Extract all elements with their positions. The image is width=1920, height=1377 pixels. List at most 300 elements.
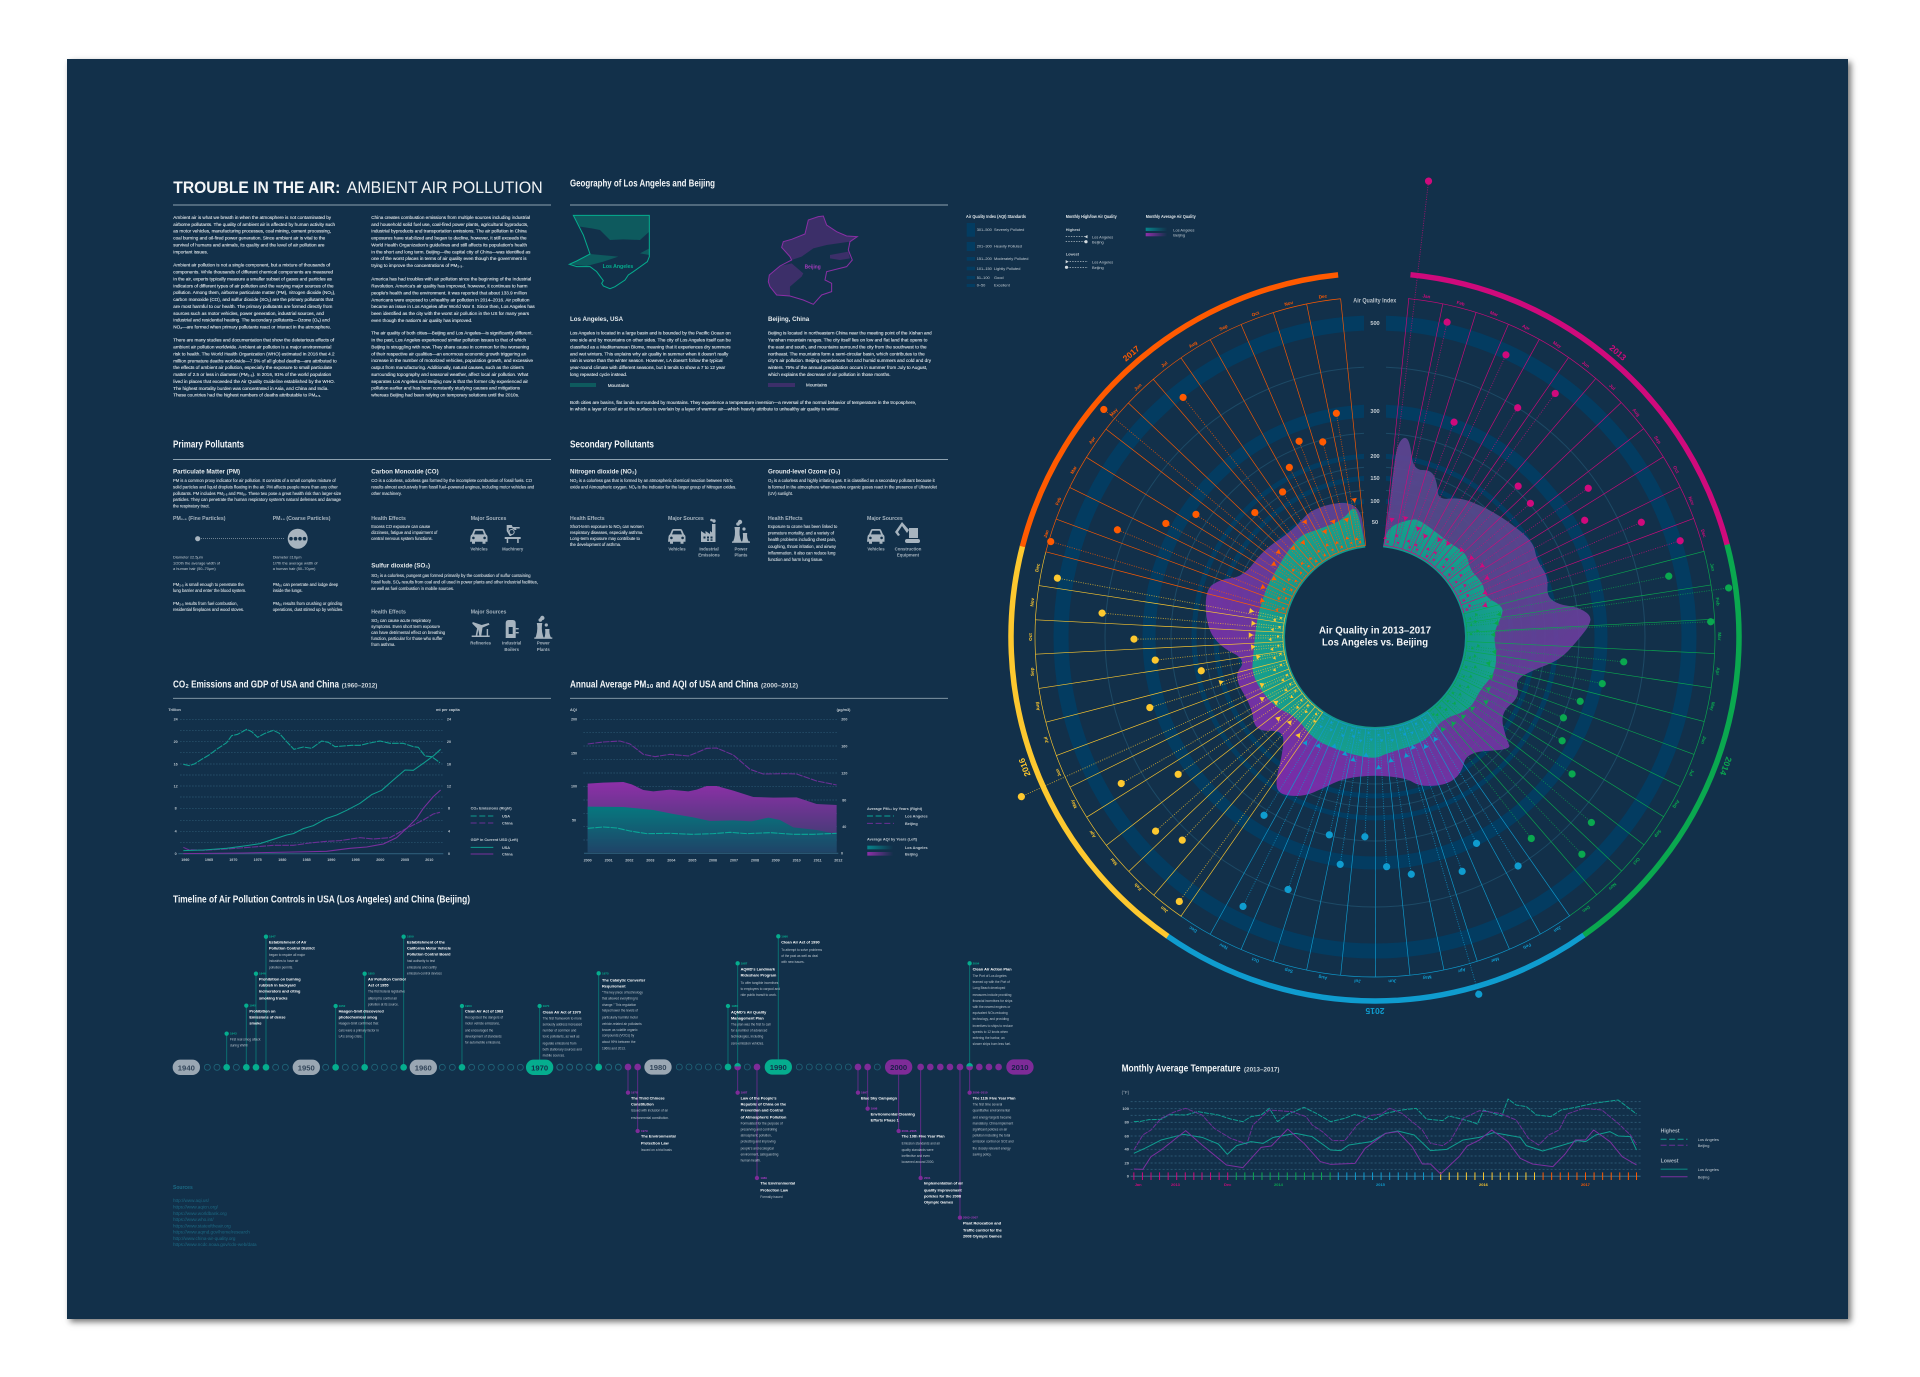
event 1998: Environmental Cleaning bbox=[871, 1113, 915, 1117]
event 2001: 2001 bbox=[924, 1176, 931, 1180]
text: particle notes: lung barrier and enter the blood system. bbox=[173, 588, 246, 593]
event 2001 bbox=[918, 1176, 963, 1205]
year 2014 sector bbox=[960, 222, 1790, 1052]
event 2000–2005: loosened around 2000. bbox=[902, 1160, 934, 1164]
event 2006–2010: mandatory. China implement bbox=[973, 1122, 1013, 1126]
labels: SO2 sources: Industrial bbox=[502, 641, 521, 646]
legend: AQI standards: 301–500 bbox=[977, 227, 993, 232]
ozone block: coughing, throat irritation, and airway bbox=[768, 544, 837, 549]
legend: temperature bbox=[1661, 1128, 1719, 1179]
Los Angeles monthly average area bbox=[1252, 509, 1503, 758]
line chart: CO2 and GDP: Trillion bbox=[168, 708, 182, 712]
year 2013 sector: Sep bbox=[1653, 435, 1662, 445]
timeline 1975–2010 bbox=[557, 934, 1034, 1239]
event 1997: 1997 bbox=[861, 1091, 868, 1095]
labels: NO2 sources: Plants bbox=[735, 553, 748, 558]
carbon monoxide block: Major Sources bbox=[471, 516, 507, 522]
intro text column 1: carbon monoxide (CO), and sulfur dioxide (SO₂) are the primary pollutants that bbox=[173, 297, 334, 302]
panel: CO2 and GDP chart bbox=[168, 679, 519, 862]
event 1986: technologies, including bbox=[731, 1035, 763, 1039]
nitrogen dioxide block: respiratory diseases, especially asthma. bbox=[570, 530, 643, 535]
legend: CO2 chart: GDP in Current USD (Left) bbox=[471, 838, 519, 842]
year 2016 sector: Jul bbox=[1043, 736, 1050, 744]
event 1975: vehicle-related air pollutants bbox=[602, 1022, 642, 1026]
sources: https://www.ncdc.noaa.gov/cdo-web/data bbox=[173, 1242, 257, 1247]
year 2016 sector: Jan bbox=[1160, 905, 1169, 914]
timeline axis 1975–2010: 1980 bbox=[649, 1063, 667, 1072]
center title bbox=[1319, 624, 1431, 648]
intro text column 2: and household solid fuel use, coal-fired power plants, agricultural byproducts, bbox=[371, 222, 528, 227]
event 1978: environmental constitution. bbox=[631, 1116, 669, 1120]
year 2014 sector: Jul bbox=[1688, 769, 1695, 777]
year 2013 sector: May bbox=[1552, 340, 1563, 349]
event 1955 bbox=[362, 971, 406, 1007]
event 1975: 1975 bbox=[602, 971, 609, 975]
event 2006–2010: quantitative environmental bbox=[973, 1109, 1010, 1113]
legend: PM10 chart: Beijing bbox=[905, 822, 918, 826]
line chart: CO2 and GDP: 1965 bbox=[205, 858, 213, 862]
intro text column 1: million premature deaths worldwide—7.5% of all global deaths—are attributed to bbox=[173, 358, 337, 363]
text: Beijing geography: northeast. The mountains form a semi-circular basin, which contributes to the bbox=[768, 351, 925, 356]
event 2004: speeds to 12 knots when bbox=[973, 1030, 1008, 1034]
line chart: CO2 and GDP: 1970 bbox=[229, 858, 237, 862]
carbon monoxide block: dizziness, fatigue and impairment of bbox=[371, 530, 438, 535]
heading: timeline: Timeline of Air Pollution Controls in USA (Los Angeles) and China (Beijing) bbox=[173, 894, 470, 906]
sources: https://www.who.int/ bbox=[173, 1217, 214, 1222]
intro text column 2: Revolution. America's air quality has improved, however, it continues to harm bbox=[371, 284, 528, 289]
AQI scale labels: 300 bbox=[1370, 409, 1380, 415]
event 1987 rideshare: 1987 bbox=[741, 961, 748, 965]
icon: particle size comparison bbox=[195, 529, 308, 549]
year 2017 sector: Oct bbox=[1251, 310, 1260, 318]
event 1963: Recognized the dangers of bbox=[465, 1016, 503, 1020]
legend: monthly high/low: Monthly High/low Air Quality bbox=[1066, 214, 1117, 219]
event 2006–2010: pollution including the total bbox=[973, 1134, 1010, 1138]
intro text column 1: Ambient air pollution is not a single component, but a mixture of thousands of bbox=[173, 263, 331, 268]
intro text column 2 bbox=[371, 215, 535, 398]
event 1979: Issued on a trial basis bbox=[641, 1148, 672, 1152]
event 1959: had authority to test bbox=[407, 959, 435, 963]
year 2013 sector: 2013 bbox=[1607, 343, 1629, 363]
year 2014 sector: Aug bbox=[1672, 799, 1681, 809]
area chart: PM10 and AQI: 2012 bbox=[834, 858, 842, 862]
intro text column 1: NO₂—are formed when primary pollutants react or interact in the atmosphere. bbox=[173, 325, 331, 330]
legend: PM10 chart: Los Angeles bbox=[905, 815, 928, 819]
text: Beijing geography: winters. 75% of the annual precipitation occurs in summer from July to August, bbox=[768, 365, 927, 370]
event 1970: Clean Air Act of 1970 bbox=[543, 1011, 581, 1015]
event 1978 bbox=[626, 1090, 669, 1120]
map: Beijing: Beijing bbox=[805, 265, 821, 271]
heading: secondary pollutants: Secondary Pollutants bbox=[570, 439, 654, 451]
intro text column 2: China creates combustion emissions from multiple sources including industrial bbox=[371, 215, 530, 220]
panel: timeline bbox=[173, 894, 1034, 1239]
line chart: temperature: 2014 bbox=[1274, 1182, 1284, 1187]
year 2013 sector: Nov bbox=[1687, 496, 1696, 506]
line chart: temperature: 20 bbox=[1125, 1160, 1130, 1165]
event 1987 rideshare: Rideshare Program bbox=[741, 974, 777, 978]
labels: ozone sources: Vehicles bbox=[867, 547, 885, 552]
nitrogen dioxide block: Health Effects bbox=[570, 516, 605, 522]
event 1945: Emissions of dense bbox=[249, 1016, 286, 1020]
sulfur dioxide block bbox=[371, 563, 538, 647]
line chart: temperature: 2015 bbox=[1376, 1182, 1386, 1187]
intro text column 2: pollution earlier and has been constantly studying causes and mitigations bbox=[371, 386, 521, 391]
event 1990: of the past as well as deal bbox=[781, 954, 818, 958]
event 1970: toxic pollutants, as well as bbox=[543, 1035, 580, 1039]
legend: temperature: Beijing bbox=[1698, 1143, 1709, 1148]
text: Los Angeles geography: one side and by mountains on other sides. The city of Los Angeles itself can be bbox=[570, 338, 731, 343]
labels: NO2 sources: Vehicles bbox=[668, 547, 686, 552]
event 2003–2007: 2008 Olympic Games bbox=[963, 1235, 1002, 1239]
area chart: PM10 and AQI: 100 bbox=[571, 785, 577, 789]
event 1959: Pollution Control Board bbox=[407, 953, 451, 957]
legend: CO2 chart: China bbox=[502, 822, 513, 826]
event 1987 atmospheric law: environment, safeguarding bbox=[741, 1153, 779, 1157]
year 2015 sector: Dec bbox=[1188, 925, 1198, 934]
labels: SO2 sources: Plants bbox=[537, 647, 550, 652]
legend: monthly high/low: Highest bbox=[1066, 227, 1081, 232]
carbon monoxide block: Carbon Monoxide (CO) bbox=[371, 469, 439, 476]
intro text column 1: airborne pollutants. The quality of ambient air is affected by human activity such bbox=[173, 222, 335, 227]
line chart: CO2 and GDP: 1990 bbox=[327, 858, 335, 862]
line chart: CO2 and GDP: 12 bbox=[174, 784, 178, 788]
intro text column 2: output from manufacturing. Additionally, natural causes, such as the cities's bbox=[371, 365, 524, 370]
nitrogen dioxide block: Short-term exposure to NO₂ can worsen bbox=[570, 524, 644, 529]
year 2015 sector bbox=[902, 164, 1848, 1110]
year 2016 sector: Feb bbox=[1133, 882, 1143, 892]
event 1952: Haagen-Smit confirmed that bbox=[339, 1022, 378, 1026]
legend: AQI standards: Lightly Polluted bbox=[994, 266, 1020, 271]
labels: CO sources bbox=[470, 547, 524, 552]
event 2006–2010: saving policy. bbox=[973, 1153, 992, 1157]
event 1947 bbox=[264, 934, 315, 970]
AQI scale labels: Air Quality Index bbox=[1353, 298, 1397, 305]
year 2015 sector: Jun bbox=[1388, 978, 1397, 984]
text: Los Angeles geography bbox=[570, 316, 731, 388]
event 1979: The Environmental bbox=[641, 1135, 676, 1139]
AQI scale labels: 100 bbox=[1370, 499, 1380, 505]
intro text column 2: industrial byproducts and transportation emissions. The air pollution in China bbox=[371, 229, 527, 234]
line chart: CO2 and GDP: 0 bbox=[175, 852, 177, 856]
intro text column 1: in the air, experts typically measure a smaller subset of gases and particles as bbox=[173, 276, 333, 281]
area chart: PM10 and AQI: 2002 bbox=[625, 858, 633, 862]
map: Beijing bbox=[768, 216, 857, 304]
area chart: PM10 and AQI: 160 bbox=[841, 744, 847, 748]
event 1945: smoke bbox=[249, 1022, 262, 1026]
intro text column 2: of their respective air qualities—an enormous economic growth triggering an bbox=[371, 351, 527, 356]
event 1975: 1960s and 2013. bbox=[602, 1047, 626, 1051]
event 1986: zero-emission vehicles. bbox=[731, 1042, 764, 1046]
year 2015 sector: Oct bbox=[1251, 956, 1260, 964]
legend: PM10 chart: Beijing bbox=[905, 853, 918, 857]
legend: monthly average: Monthly Average Air Quality bbox=[1146, 214, 1196, 219]
intro text column 2: surrounding topography and seasonal weather, affect local air pollution. What bbox=[371, 372, 529, 377]
event 1946: rubbish in backyard bbox=[259, 984, 296, 988]
icon: vehicles bbox=[867, 529, 884, 544]
event 2006–2010: significant policies on air bbox=[973, 1128, 1008, 1132]
map: Los Angeles bbox=[569, 215, 649, 289]
event 1955: Air Pollution Control bbox=[368, 978, 406, 982]
event 2003–2007 bbox=[958, 1215, 1003, 1239]
Beijing monthly average area bbox=[1206, 438, 1590, 796]
event 1959: Establishment of the bbox=[407, 941, 446, 945]
text: both cities: in which a layer of cool air at the surface is overlain by a layer of warmer air—which heavily attribute to unhealthy air quality in winter. bbox=[570, 407, 840, 412]
year 2016 sector: May bbox=[1069, 799, 1078, 809]
timeline axis 1940–1979 bbox=[173, 1060, 621, 1075]
year 2016 sector: Oct bbox=[1028, 633, 1033, 641]
line chart: CO2 and GDP: 16 bbox=[447, 762, 451, 766]
icon: industrial boilers bbox=[506, 620, 519, 638]
legend: AQI standards: 151–200 bbox=[977, 256, 993, 261]
event 2006–2010: The first time several bbox=[973, 1103, 1002, 1107]
timeline axis 1975–2010: 2000 bbox=[890, 1063, 907, 1072]
panel: monthly average temperature bbox=[1122, 1063, 1719, 1187]
legend: AQI standards: Moderately Polluted bbox=[994, 256, 1028, 261]
panel: secondary pollutants bbox=[570, 439, 938, 562]
line chart: CO2 and GDP: 1975 bbox=[254, 858, 262, 862]
legend: monthly high/low: Los Angeles bbox=[1092, 234, 1113, 240]
sulfur dioxide block: Sulfur dioxide (SO₂) bbox=[371, 563, 430, 570]
intro text column 1: indicators of different types of air pollution and the varying major sources of the bbox=[173, 283, 334, 288]
line chart: CO2 and GDP: 1980 bbox=[278, 858, 286, 862]
year 2016 sector: 2016 bbox=[1016, 757, 1032, 778]
area chart: PM10 and AQI: 200 bbox=[841, 718, 847, 722]
event 1955: The first federal legislative bbox=[368, 990, 405, 994]
year 2017 sector bbox=[961, 223, 1789, 1051]
icon: industrial emissions bbox=[701, 519, 716, 542]
area chart: PM10 and AQI: 2001 bbox=[605, 858, 613, 862]
event 2006–2010: the closely relevant energy bbox=[973, 1147, 1011, 1151]
intro text column 1: The highest mortality burden was concentrated in Asia, and China and India. bbox=[173, 386, 329, 391]
carbon monoxide block: Excess CO exposure can cause bbox=[371, 524, 431, 529]
carbon monoxide block: other machinery. bbox=[371, 491, 402, 496]
carbon monoxide block: results almost exclusively from fossil fuel–powered engines, including motor vehicles and bbox=[371, 484, 535, 490]
event 2004: Clean Air Action Plan bbox=[973, 968, 1012, 972]
event 1970: both stationary sources and bbox=[543, 1048, 582, 1052]
legend: AQI standards: Severely Polluted bbox=[994, 227, 1024, 232]
intro text column 1: survival of humans and animals, its quality and the level of air pollution are bbox=[173, 242, 325, 247]
event 1945: Prohibition on bbox=[249, 1010, 276, 1014]
event 1975: particularly harmful motor bbox=[602, 1016, 639, 1020]
particulate matter block: solid particles and liquid droplets floating in the air. PM affects people more than any other bbox=[173, 484, 338, 489]
intro text column 1: components. While thousands of different chemical components are measured bbox=[173, 270, 334, 275]
event 1975: Requirement bbox=[602, 985, 626, 989]
text: Los Angeles geography: rain is worse than the winter season. However, LA doesn't follow the typical bbox=[570, 358, 723, 363]
event 1987 atmospheric law: people's and ecological bbox=[741, 1147, 774, 1151]
AQI scale labels: 500 bbox=[1370, 321, 1380, 327]
line chart: CO2 and GDP: 1985 bbox=[303, 858, 311, 862]
event 2004: technology, and providing bbox=[973, 1017, 1009, 1021]
panel: geography bbox=[569, 178, 932, 412]
legend: monthly high/low: Lowest bbox=[1066, 252, 1080, 257]
area chart: PM10 and AQI: 2005 bbox=[688, 858, 696, 862]
sulfur dioxide block: as well as fuel combustion in mobile sources. bbox=[371, 586, 454, 591]
event 1987 atmospheric law: Formulated for the purpose of bbox=[741, 1122, 783, 1126]
intro text column 2: The air quality of both cities—Beijing and Los Angeles—is significantly different. bbox=[371, 331, 533, 336]
area chart: PM10 and AQI: 120 bbox=[841, 771, 847, 775]
intro text column 2: Americans were exposed to unhealthy air pollution in 2014–2016. Air pollution bbox=[371, 297, 530, 302]
carbon monoxide block: Health Effects bbox=[371, 516, 406, 522]
legend: monthly average: Beijing bbox=[1173, 233, 1185, 238]
event 1955: Act of 1955 bbox=[368, 984, 389, 988]
text: particle notes: PM₂.₅ is small enough to penetrate the bbox=[173, 582, 244, 587]
event 1979: 1979 bbox=[641, 1129, 648, 1133]
text: Los Angeles geography: and wet winters. This explains why air quality in summer when it doesn't really bbox=[570, 351, 729, 356]
event 1987 atmospheric law: of Atmospheric Pollution bbox=[741, 1116, 787, 1120]
year 2015 sector: Sep bbox=[1284, 967, 1293, 974]
intro text column 1: lived in places that exceeded the Air Quality Guideline established by the WHO. bbox=[173, 379, 335, 384]
ozone block: premature mortality, and a variety of bbox=[768, 531, 835, 536]
text: particle notes: Diameter ≤10μm bbox=[273, 555, 302, 560]
area chart: PM10 and AQI: 2000 bbox=[584, 858, 592, 862]
poster title: AMBIENT AIR POLLUTION bbox=[347, 178, 543, 197]
area chart: PM10 and AQI: 200 bbox=[571, 718, 577, 722]
sulfur dioxide block: function, particular for those who suffer bbox=[371, 636, 443, 641]
intro text column 2: increase in the number of motorized vehicles, population growth, and excessive bbox=[371, 358, 533, 363]
timeline axis 1975–2010: 1990 bbox=[770, 1063, 787, 1072]
area chart: PM10 and AQI: AQI bbox=[570, 708, 577, 712]
legend: AQI standards: 101–150 bbox=[977, 266, 993, 271]
particulate matter block bbox=[173, 469, 342, 522]
text: particle notes: operations, dust stirred up by vehicles. bbox=[273, 607, 343, 612]
event 1975: that allowed everything to bbox=[602, 997, 638, 1001]
event 1947: Pollution Control District bbox=[269, 947, 315, 951]
intro text column 2: even though the nation's air quality has improved. bbox=[371, 318, 472, 323]
year 2014 sector: 2014 bbox=[1718, 756, 1734, 777]
line chart: CO2 and GDP: 4 bbox=[448, 830, 451, 834]
event 1947: pollution permits. bbox=[269, 966, 293, 970]
year 2015 sector: May bbox=[1422, 974, 1432, 981]
event 1975: about 99% between the bbox=[602, 1040, 636, 1044]
legend: PM10 chart bbox=[867, 807, 928, 857]
event 1959: 1959 bbox=[407, 935, 414, 939]
line chart: temperature: Jan bbox=[1135, 1182, 1142, 1187]
year 2014 sector: Jan bbox=[1709, 563, 1716, 572]
event 1990: To attempt to solve problems bbox=[781, 948, 822, 952]
intro text column 2: trying to improve the concentrations of PM₂.₅. bbox=[371, 263, 464, 268]
area chart: PM10 and AQI: 150 bbox=[571, 752, 577, 756]
ozone block: health problems including chest pain, bbox=[768, 537, 836, 542]
timeline axis 1940–1979: 1960 bbox=[415, 1063, 432, 1072]
event 1975: helped lower the levels of bbox=[602, 1009, 638, 1013]
intro text column 2: became an issue in Los Angeles after World War II. Since then, Los Angeles has bbox=[371, 304, 535, 309]
area chart: PM10 and AQI: 2006 bbox=[709, 858, 717, 862]
line chart: temperature: Dec bbox=[1224, 1182, 1232, 1187]
event 1990: Clean Air Act of 1990 bbox=[781, 941, 820, 945]
intro text column 1: coal burning and oil-fired power generation. Since ambient air is vital to the bbox=[173, 236, 326, 241]
area chart: PM10 and AQI: 2008 bbox=[751, 858, 759, 862]
event 1947: 1947 bbox=[269, 935, 276, 939]
timeline axis 1940–1979: 1970 bbox=[531, 1063, 548, 1072]
event 1986 bbox=[726, 1004, 771, 1046]
event 1970: The first framework to more bbox=[543, 1017, 582, 1021]
event 2004 bbox=[967, 961, 1013, 1046]
event 2001: Olympic Games bbox=[924, 1201, 953, 1205]
line chart: temperature: (°F) bbox=[1122, 1090, 1130, 1095]
legend: AQI standards bbox=[966, 214, 1028, 288]
heading: temperature: (2013–2017) bbox=[1244, 1067, 1280, 1074]
year 2014 sector: Sep bbox=[1653, 829, 1662, 839]
year 2015 sector: Jan bbox=[1553, 925, 1562, 933]
year 2017 sector: Jun bbox=[1133, 382, 1143, 392]
event 1978: Issued with inclusion of an bbox=[631, 1109, 668, 1113]
event 2004: financial incentives for ships bbox=[973, 999, 1013, 1003]
event 1963: for automobile emissions. bbox=[465, 1041, 501, 1045]
event 1975: The Catalytic Converter bbox=[602, 979, 646, 983]
event 1978: 1978 bbox=[631, 1091, 638, 1095]
line chart: temperature: 80 bbox=[1125, 1120, 1130, 1125]
particulate matter block: PM₁₀ (Coarse Particles) bbox=[273, 516, 331, 522]
carbon monoxide block: CO is a colorless, odorless gas formed by the incomplete combustion of fossil fuels. CO bbox=[371, 478, 533, 483]
intro text column 1: ambient air pollution worldwide. Ambient air pollution is a major environmental bbox=[173, 345, 331, 350]
heading: primary pollutants: Primary Pollutants bbox=[173, 439, 244, 451]
event 1978: The Third Chinese bbox=[631, 1097, 666, 1101]
sources: https://www.aqicn.org/ bbox=[173, 1204, 219, 1210]
event 1990: with new issues. bbox=[781, 960, 805, 964]
center title: Los Angeles vs. Beijing bbox=[1322, 636, 1428, 648]
event 2004: with the newest engines or bbox=[973, 1005, 1011, 1009]
legend: monthly average: Los Angeles bbox=[1173, 228, 1195, 232]
event 1946: incinerators and citing bbox=[259, 990, 301, 994]
labels: SO2 sources: Boilers bbox=[504, 647, 520, 652]
legend: AQI standards: 201–300 bbox=[977, 244, 993, 249]
ozone block bbox=[768, 469, 938, 562]
line chart: temperature: 2017 bbox=[1581, 1182, 1591, 1187]
text: particle notes: inside the lungs. bbox=[273, 588, 303, 593]
text: particle notes: PM₁₀ can penetrate and lodge deep bbox=[273, 582, 339, 587]
labels: SO2 sources: Power bbox=[537, 641, 550, 646]
ozone block: (UV) sunlight. bbox=[768, 491, 793, 496]
event 1943: First real smog attack bbox=[230, 1038, 261, 1042]
labels: NO2 sources bbox=[668, 547, 748, 558]
event 2004: The Port of Los Angeles bbox=[973, 974, 1007, 978]
text: Los Angeles geography: Los Angeles, USA bbox=[570, 316, 624, 323]
intro text column 1: matter of 2.5 or less in diameter (PM₂.₅). In 2016, 91% of the world population bbox=[173, 372, 332, 377]
legend: CO2 chart bbox=[471, 807, 519, 857]
text: both cities: Both cities are basins, flat lands surrounded by mountains. They experience a temperature inversion—a reversal of the normal behavior of temperature in the troposphere, bbox=[570, 400, 916, 405]
legend: monthly high/low: Beijing bbox=[1092, 265, 1104, 270]
labels: SO2 sources bbox=[470, 641, 550, 652]
AQI scale labels bbox=[1353, 298, 1397, 526]
line chart: CO2 and GDP: 2000 bbox=[376, 858, 384, 862]
legend: temperature: Lowest bbox=[1661, 1158, 1679, 1164]
event 1945: 1945 bbox=[249, 1004, 256, 1008]
area chart: PM10 and AQI: 2011 bbox=[814, 858, 822, 862]
event 2000–2005: 2000–2005 bbox=[902, 1129, 917, 1133]
center circle bbox=[1285, 547, 1465, 727]
event 1943: 1943 bbox=[230, 1032, 237, 1036]
area chart: PM10 and AQI: 80 bbox=[842, 798, 846, 802]
line chart: temperature: 60 bbox=[1125, 1133, 1130, 1138]
labels: NO2 sources: Industrial bbox=[699, 547, 719, 552]
event 1989: The Environmental bbox=[760, 1182, 795, 1186]
labels: SO2 sources: Refineries bbox=[470, 641, 492, 646]
event 1959: California Motor Vehicle bbox=[407, 947, 452, 951]
area chart: PM10 and AQI bbox=[570, 708, 851, 862]
year 2017 sector: Dec bbox=[1318, 293, 1328, 300]
year 2016 sector: Mar bbox=[1109, 857, 1118, 866]
text: Los Angeles geography: Mountains bbox=[608, 383, 630, 388]
intro text column 2: Beijing is struggling with now. They share cause in common for the worsening bbox=[371, 344, 529, 349]
year 2015 sector: Aug bbox=[1318, 974, 1328, 981]
event 2000–2005: quality standards were bbox=[902, 1148, 934, 1152]
text: Beijing geography bbox=[768, 316, 932, 388]
legend: AQI standards: Good bbox=[994, 275, 1004, 280]
line chart: CO2 and GDP: mt per capita bbox=[436, 708, 461, 712]
event 1998: Efforts Phase 1 bbox=[871, 1119, 900, 1123]
line chart: CO2 and GDP: 4 bbox=[175, 830, 178, 834]
text: Beijing geography: Mountains bbox=[806, 382, 828, 388]
